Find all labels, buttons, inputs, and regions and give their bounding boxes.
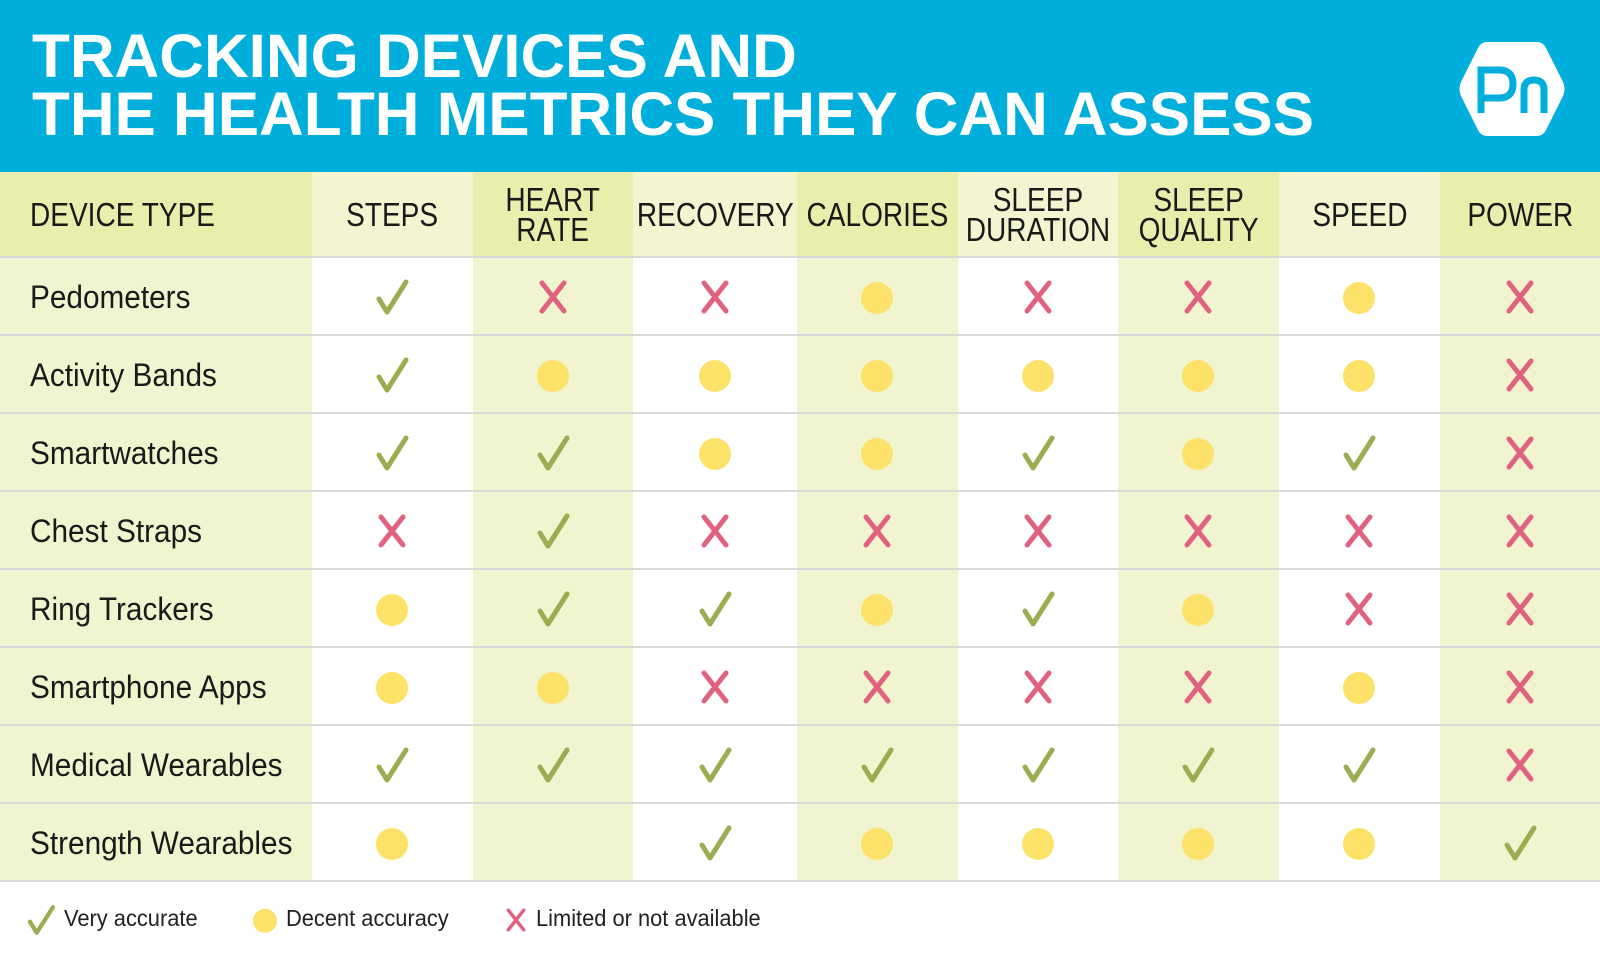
header row: STEPS (347, 196, 438, 232)
row: Strength Wearables (30, 825, 1536, 861)
row: Smartphone Apps: Smartphone Apps (30, 669, 267, 705)
row: Ring Trackers: Ring Trackers (30, 591, 214, 627)
legend: limited: Limited or not available (536, 905, 761, 931)
row: Activity Bands: Activity Bands (30, 357, 217, 393)
legend: very accurate (28, 905, 198, 935)
header row: DURATION (966, 210, 1110, 248)
header row (0, 172, 1600, 256)
row: Chest Straps (30, 513, 1534, 549)
row: Medical Wearables (30, 747, 1534, 783)
legend: very accurate: Very accurate (64, 905, 198, 931)
header row: RECOVERY (637, 196, 793, 232)
header row: SLEEP (1153, 180, 1244, 218)
legend: decent accuracy: Decent accuracy (286, 905, 449, 931)
column backgrounds (0, 258, 1600, 880)
row: Strength Wearables: Strength Wearables (30, 825, 292, 861)
row: Smartwatches: Smartwatches (30, 435, 219, 471)
header row: POWER (1467, 196, 1573, 232)
header row: RATE (517, 210, 589, 248)
header row: SLEEP (993, 180, 1083, 218)
row: Ring Trackers (30, 591, 1534, 627)
header row: QUALITY (1138, 210, 1259, 248)
header row: SPEED (1312, 196, 1407, 232)
row: Chest Straps: Chest Straps (30, 513, 202, 549)
row: Smartphone Apps (30, 669, 1534, 705)
header row: CALORIES (807, 196, 948, 232)
header row: DEVICE TYPE (30, 196, 215, 232)
title: TRACKING DEVICES AND (32, 22, 797, 90)
title: THE HEALTH METRICS THEY CAN ASSESS (32, 80, 1314, 148)
row: Pedometers (30, 279, 1534, 315)
legend (28, 905, 761, 935)
icon: Pn logo (1460, 42, 1564, 136)
row: Medical Wearables: Medical Wearables (30, 747, 283, 783)
header banner (0, 0, 1600, 172)
header row: HEART (506, 180, 600, 218)
row: Activity Bands (30, 357, 1534, 393)
row: Pedometers: Pedometers (30, 279, 190, 315)
row: Smartwatches (30, 435, 1534, 471)
title (32, 22, 1314, 148)
